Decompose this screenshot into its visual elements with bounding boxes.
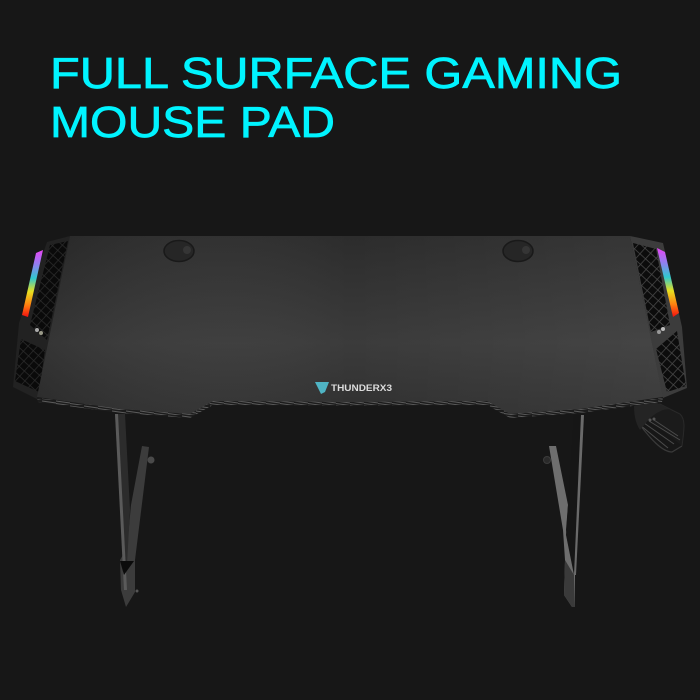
title: [50, 49, 622, 147]
right control buttons: [657, 327, 665, 334]
ThunderX3 logo: THUNDERX3: [331, 383, 392, 393]
left side wing with mesh: [13, 236, 70, 399]
left control buttons: [35, 328, 43, 335]
right cable grommet: [503, 240, 533, 262]
right desk leg: [544, 415, 585, 607]
icon: headset hook and cup holder: [634, 402, 684, 452]
right RGB light strip: [657, 248, 679, 317]
left RGB light strip: [22, 250, 43, 317]
icon: logo shield: [315, 382, 329, 394]
right side wing with mesh: [630, 236, 687, 398]
title: MOUSE PAD: [50, 98, 335, 147]
ThunderX3 logo: [315, 382, 392, 394]
desk top surface: [37, 236, 663, 414]
left cable grommet: [164, 240, 194, 262]
left desk leg: [115, 414, 154, 607]
title: FULL SURFACE GAMING: [50, 49, 622, 98]
desk edge carbon fibre strip: [37, 398, 663, 418]
